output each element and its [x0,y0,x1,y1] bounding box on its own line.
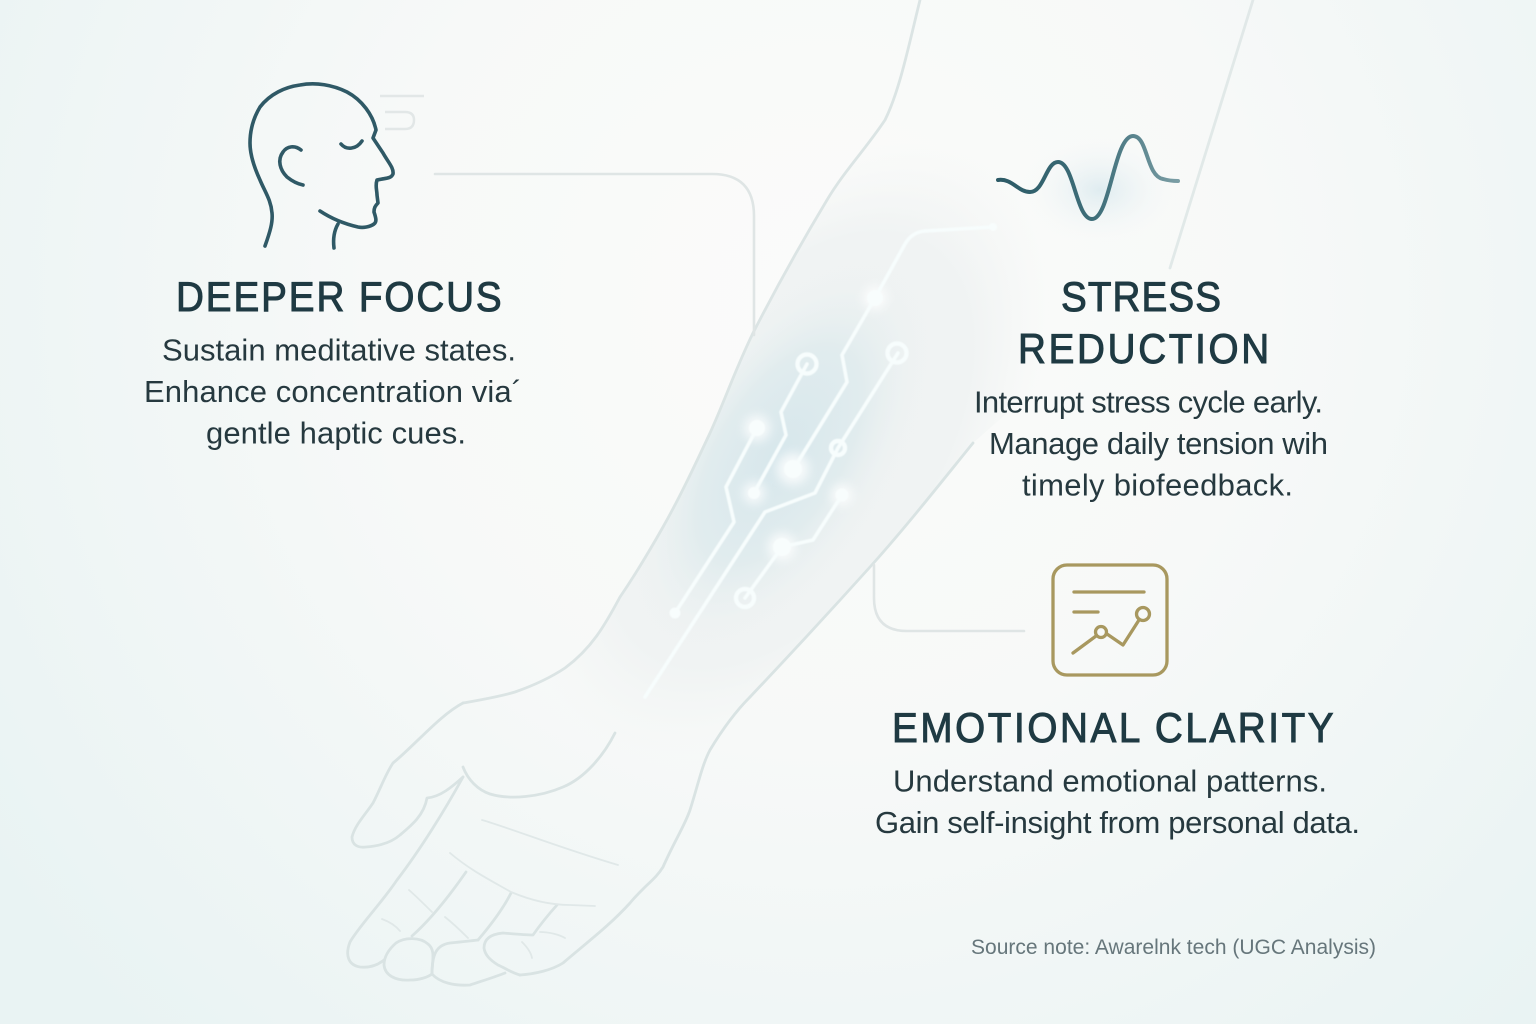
text: emotional clarity description [875,764,1360,840]
text: deeper focus description: Enhance concentration via´ [144,374,522,409]
text: deeper focus description: gentle haptic cues. [206,416,466,450]
trace group [645,223,997,697]
heading: stress reduction [1018,272,1269,372]
heading: stress reduction: STRESS [1061,272,1221,320]
hand outline [348,697,750,985]
text: deeper focus description: Sustain meditative states. [162,332,516,368]
icon: motion lines [380,96,424,129]
illustration: forearm and hand [348,0,1253,985]
connector: emotional clarity to arm [874,565,1024,631]
forearm tint and glow [627,219,980,648]
text: stress reduction description: Interrupt stress cycle early. [974,384,1323,420]
icon: biofeedback wave [998,135,1180,245]
panel: deeper focus [144,84,522,450]
icon: chart card [1053,565,1167,675]
source note: Source note: Awarelnk tech (UGC Analysis) [971,936,1376,959]
circuit traces on forearm [645,223,997,697]
heading: emotional clarity: EMOTIONAL CLARITY [892,703,1334,751]
text: emotional clarity description: Understand emotional patterns. [893,764,1327,798]
circuit glow [743,286,887,561]
text: stress reduction description [974,384,1328,502]
panel: stress reduction [974,135,1328,502]
text: deeper focus description [144,332,522,450]
heading: stress reduction: REDUCTION [1018,324,1269,372]
connector: deeper focus to arm [435,174,754,335]
arm outline [463,0,1253,703]
text: stress reduction description: timely biofeedback. [1022,468,1293,502]
icon: head in profile [250,84,424,248]
panel: emotional clarity [875,565,1360,840]
text: emotional clarity description: Gain self-insight from personal data. [875,805,1360,840]
heading: deeper focus: DEEPER FOCUS [176,272,502,320]
text: stress reduction description: Manage daily tension wih [989,426,1328,461]
